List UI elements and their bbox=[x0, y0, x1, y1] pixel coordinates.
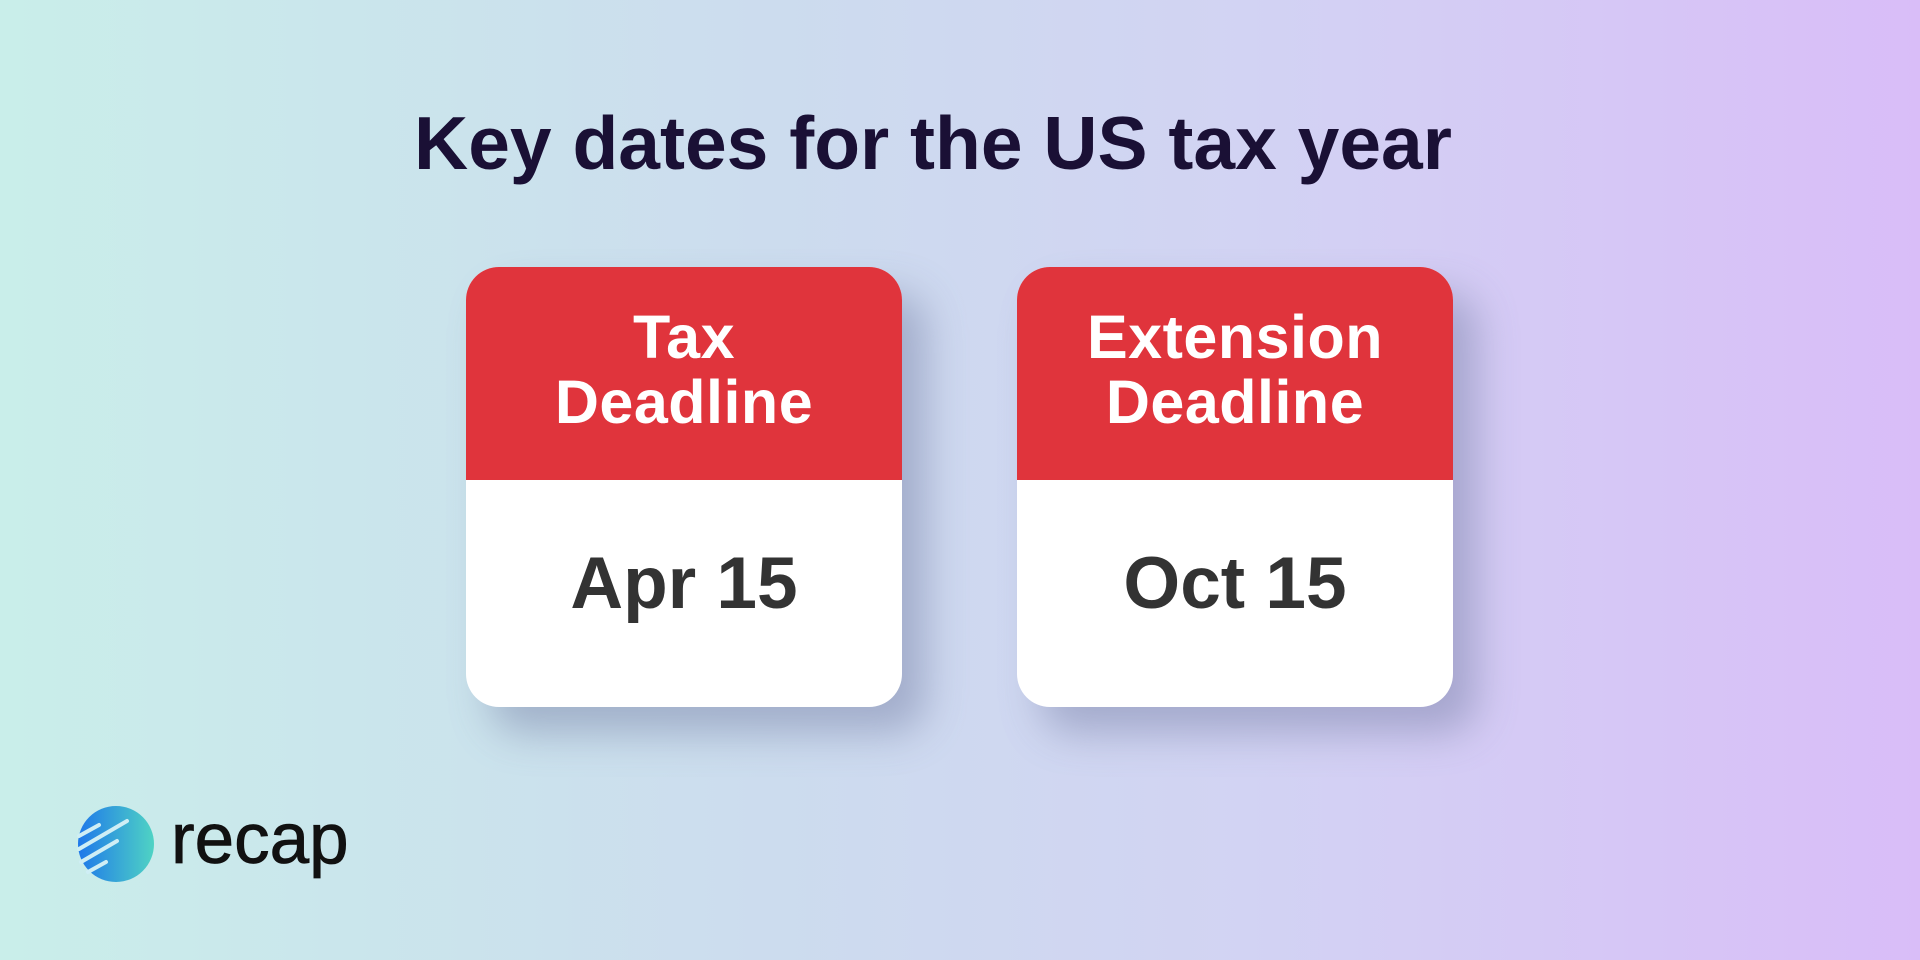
panel: extension deadline card bbox=[1017, 267, 1453, 707]
panel: tax deadline card bbox=[466, 267, 902, 707]
title: Key dates for the US tax year bbox=[414, 101, 1452, 185]
date: Apr 15: Apr 15 bbox=[570, 543, 798, 624]
card header: Tax Deadline: Tax bbox=[633, 303, 735, 371]
card header: Extension Deadline: Deadline bbox=[1106, 368, 1364, 436]
card header: Extension Deadline: Extension bbox=[1087, 303, 1383, 371]
card header: Tax Deadline: Deadline bbox=[555, 368, 813, 436]
date: Oct 15: Oct 15 bbox=[1123, 543, 1347, 624]
logo: recap bbox=[77, 800, 349, 882]
card header: Extension Deadline bbox=[1017, 267, 1453, 480]
logo text: recap bbox=[171, 800, 349, 879]
icon: recap logo circle bbox=[77, 806, 154, 882]
card header: Tax Deadline bbox=[466, 267, 902, 480]
